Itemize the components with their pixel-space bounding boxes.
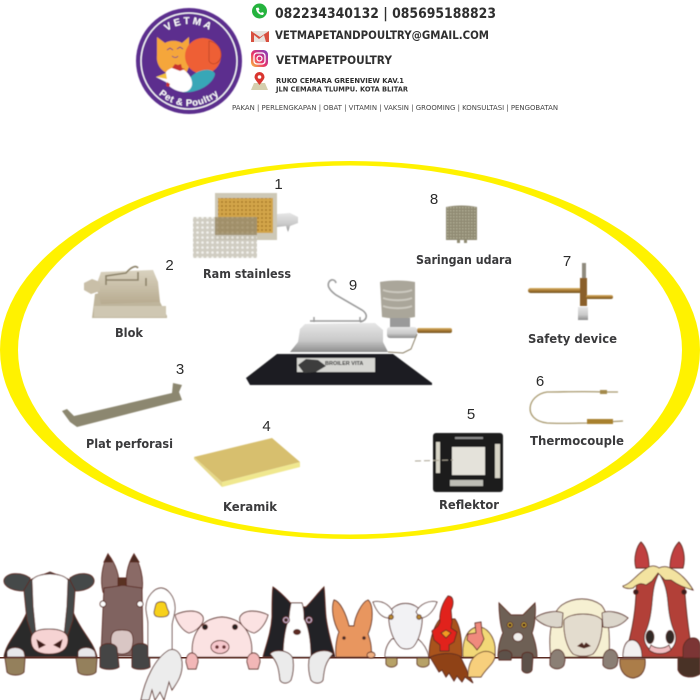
contact: address [251, 72, 409, 94]
part 6: thermocouple: 6 [536, 373, 544, 390]
label: Thermocouple: Thermocouple [530, 434, 624, 448]
contact: email: VETMAPETANDPOULTRY@GMAIL.COM [275, 28, 489, 42]
part 2: blok [84, 257, 174, 318]
label: Blok: Blok [115, 326, 144, 340]
animal: goat [373, 601, 437, 667]
part 5: reflektor [415, 406, 503, 492]
part 9: assembled Broiler Vita burner: 9 [349, 277, 357, 294]
services line: PAKAN | PERLENGKAPAN | OBAT | VITAMIN | VAKSIN | GROOMING | KONSULTASI | PENGOBATAN [232, 104, 558, 112]
animal: hen [463, 622, 495, 677]
part 5: reflektor: 5 [467, 406, 475, 423]
label: Plat perforasi: Plat perforasi [86, 437, 173, 451]
animal: border collie [263, 587, 335, 683]
logo: Vetma Pet & Poultry [135, 7, 243, 115]
part 8: saringan udara: 8 [430, 191, 438, 208]
animal: horse [620, 542, 700, 678]
part 1: ram stainless [193, 176, 298, 258]
contact: phone numbers [252, 4, 496, 22]
label: Keramik: Keramik [223, 500, 278, 514]
part 8: saringan udara [430, 191, 477, 243]
contact: phone numbers: 082234340132 | 085695188823 [275, 6, 496, 22]
animal: rabbit [333, 600, 375, 658]
yellow oval frame [0, 161, 700, 539]
part 6: thermocouple [530, 373, 623, 424]
part 2: blok: 2 [165, 257, 174, 274]
animal: sheep [535, 599, 628, 669]
label: Saringan udara: Saringan udara [416, 253, 512, 267]
part 1: ram stainless: 1 [274, 176, 283, 193]
logo: Vetma Pet & Poultry: VETMA [162, 16, 211, 31]
part 4: keramik: 4 [262, 418, 271, 435]
logo: Vetma Pet & Poultry: Pet & Poultry [158, 88, 218, 107]
part 9: assembled Broiler Vita burner: BROILER VITA [325, 361, 363, 367]
label: Safety device: Safety device [528, 332, 617, 346]
part 3: plat perforasi [62, 361, 184, 427]
label: Reflektor: Reflektor [439, 498, 499, 512]
animal: duck [141, 588, 182, 700]
animal: pig [175, 611, 268, 669]
label: Ram stainless: Ram stainless [203, 267, 291, 281]
animal: cow [4, 572, 97, 675]
contact: address: JLN CEMARA TLUMPU. KOTA BLITAR [275, 86, 409, 94]
contact: instagram [251, 50, 393, 67]
animal: cat [498, 603, 537, 673]
contact: address: RUKO CEMARA GREENVIEW KAV.1 [276, 77, 404, 85]
part 7: safety device: 7 [563, 253, 571, 270]
animal row: baseline rail [0, 657, 680, 658]
part 4: keramik [194, 418, 300, 487]
part 3: plat perforasi: 3 [176, 361, 184, 378]
part 9: assembled Broiler Vita burner [246, 277, 452, 385]
contact: instagram: VETMAPETPOULTRY [276, 53, 393, 67]
animal: rooster [429, 596, 473, 683]
animal: donkey [100, 554, 150, 669]
part 7: safety device [528, 253, 613, 320]
